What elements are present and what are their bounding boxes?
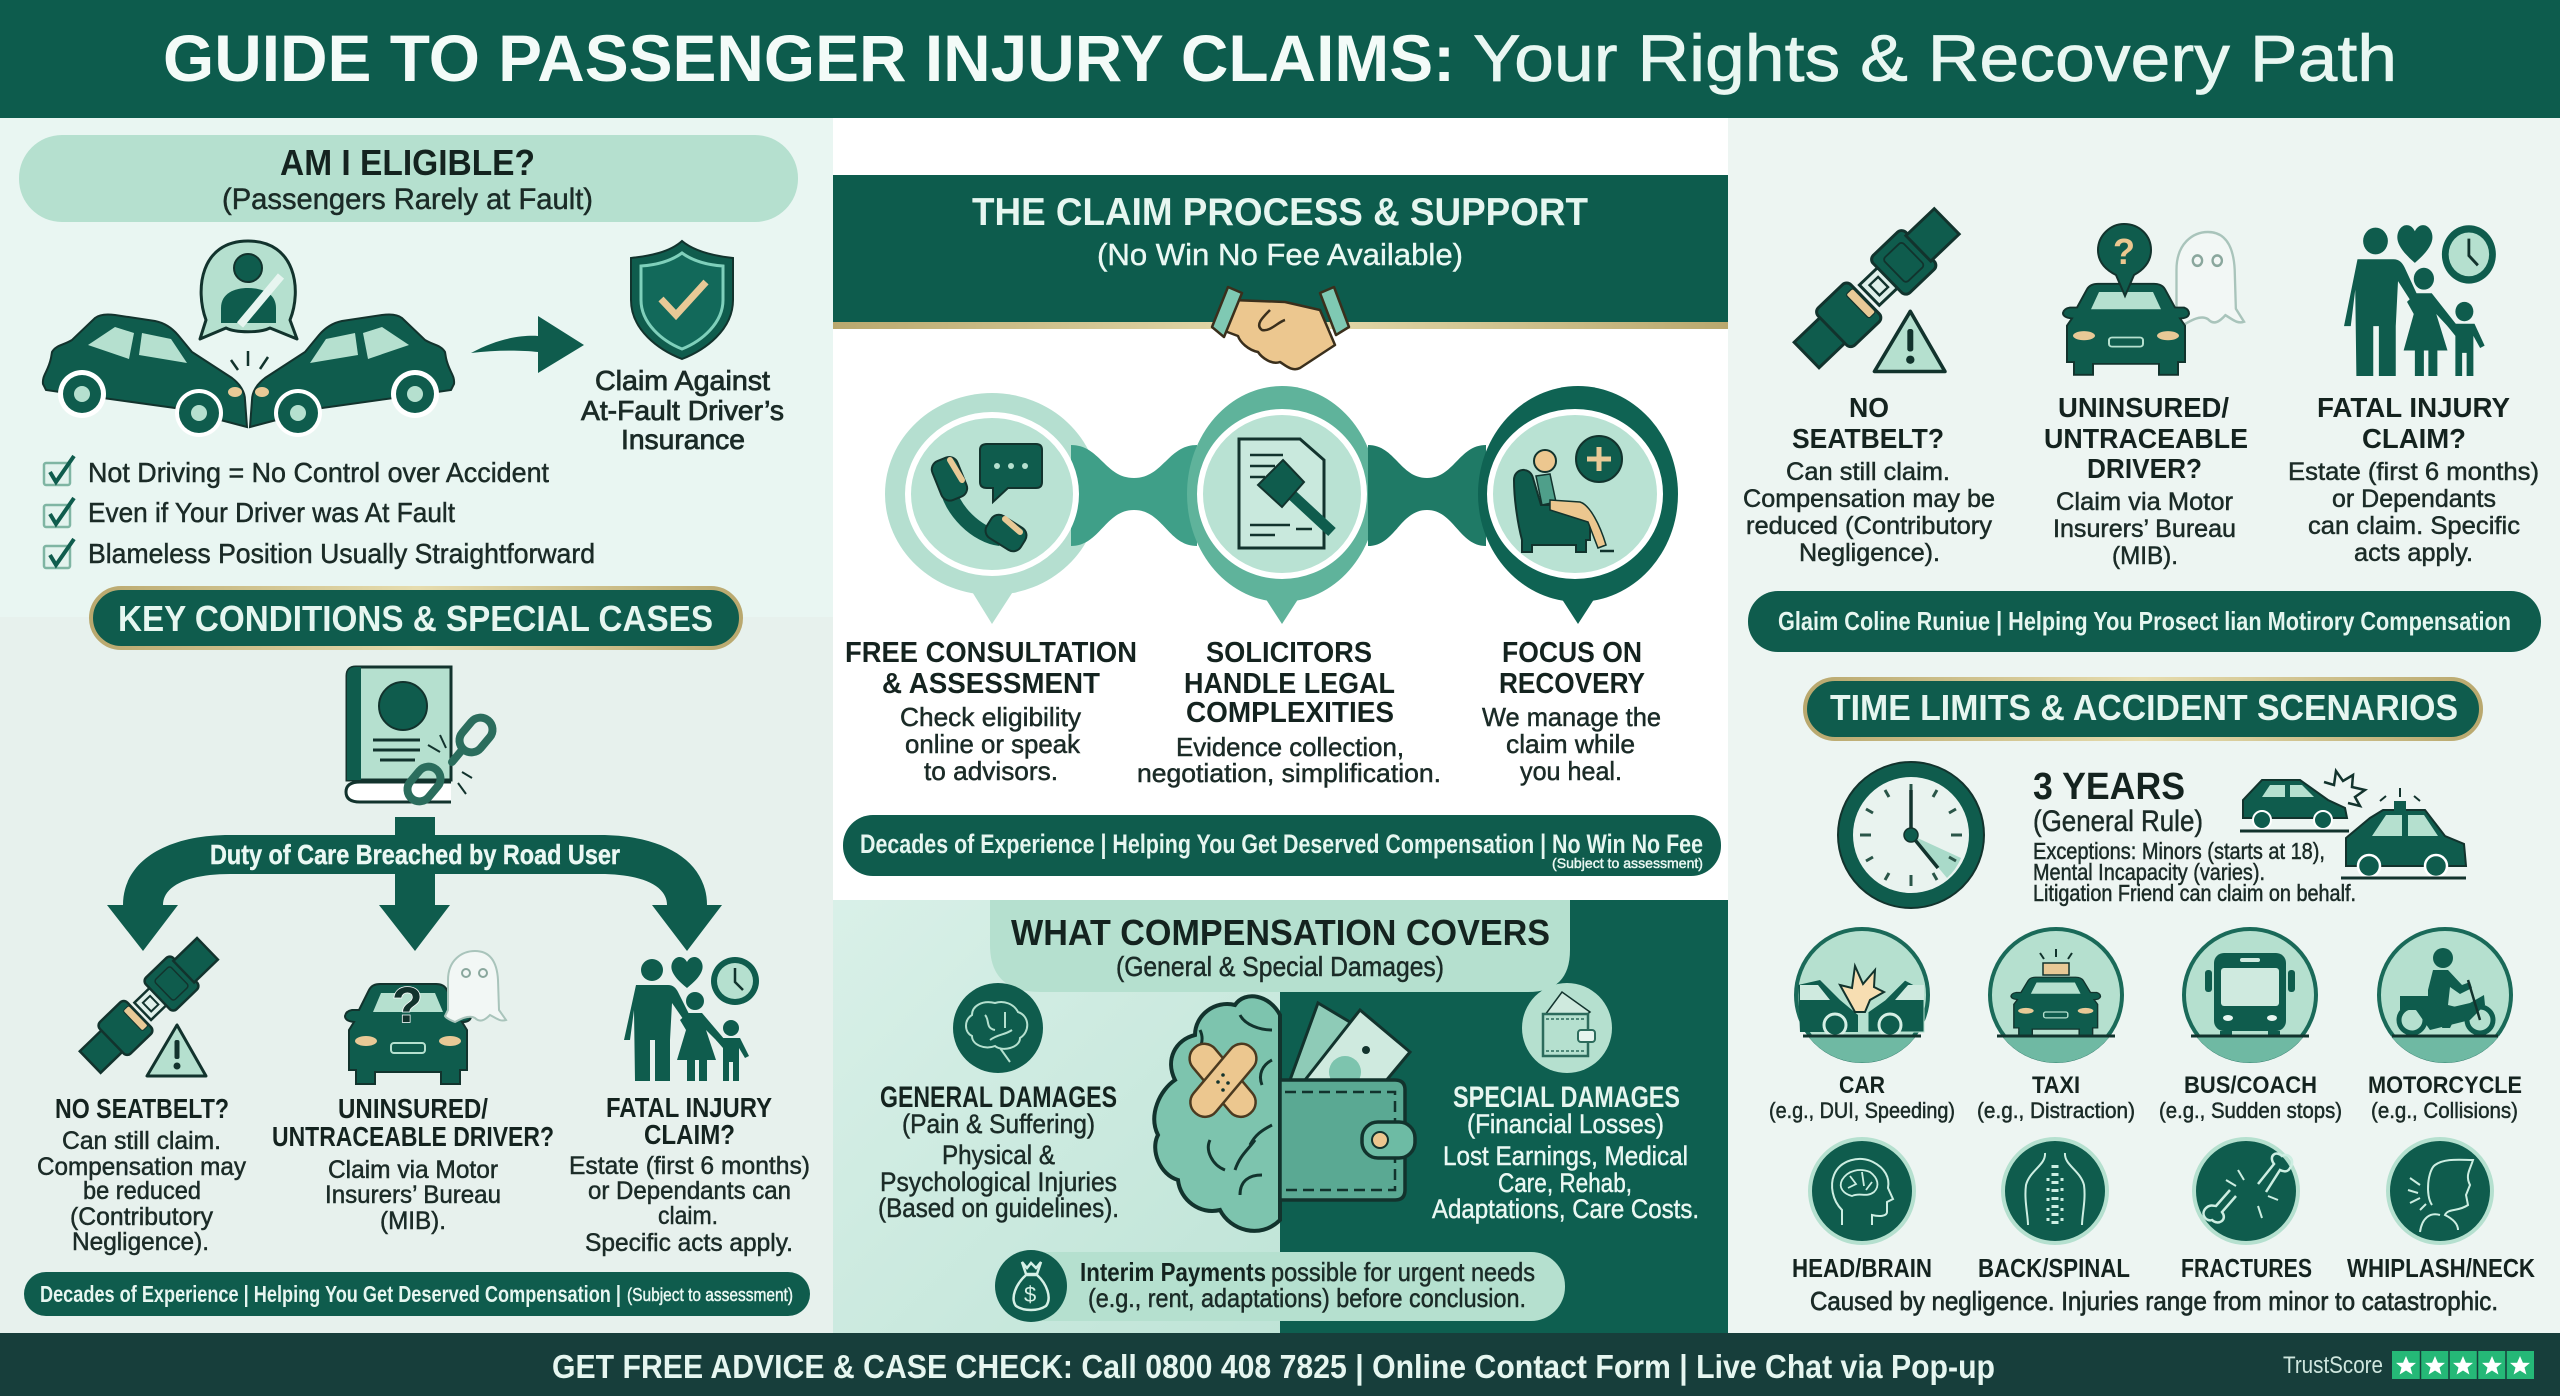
scenario: bus or coach: (e.g., Sudden stops)	[2159, 1098, 2342, 1123]
step 1 text	[845, 637, 1137, 786]
heading: time limits	[1805, 679, 2481, 739]
case: no seatbelt: (Contributory	[70, 1203, 213, 1231]
case: uninsured driver: UNTRACEABLE DRIVER?	[272, 1121, 554, 1152]
trust score rating	[2283, 1351, 2534, 1379]
injury: back and spine	[2003, 1139, 2107, 1243]
case: no seatbelt: be reduced	[83, 1177, 201, 1205]
icon: car collision	[2240, 771, 2466, 878]
case: no seatbelt: SEATBELT?	[1792, 423, 1944, 454]
flow: duty of care branching arrows	[107, 817, 722, 951]
text: claim against insurance: At-Fault Driver’s	[581, 395, 784, 426]
case: uninsured driver: (MIB).	[380, 1207, 446, 1235]
case: uninsured driver	[2044, 224, 2248, 570]
case: uninsured driver	[272, 951, 554, 1235]
case: no seatbelt: Compensation may	[37, 1153, 246, 1181]
footer call to action	[0, 1333, 2560, 1396]
step 2 text: Evidence collection,	[1176, 732, 1404, 762]
step 3 text: RECOVERY	[1499, 668, 1645, 700]
text: three year rule	[2033, 766, 2356, 906]
heading: compensation	[990, 900, 1570, 992]
text: injury labels: Caused by negligence. Injuries range from minor to catastrophic.	[1810, 1286, 2498, 1316]
callout: interim payments	[995, 1250, 1565, 1322]
flow: duty of care branching arrows: Duty of Care Breached by Road User	[210, 839, 620, 870]
panel: am I eligible	[19, 135, 798, 569]
case: uninsured driver: ?	[2113, 231, 2135, 272]
text: three year rule: Exceptions: Minors (starts at 18),	[2033, 838, 2325, 864]
heading: compensation: WHAT COMPENSATION COVERS	[1011, 912, 1550, 953]
case: no seatbelt: Compensation may be	[1743, 485, 1995, 513]
case: fatal injury: Estate (first 6 months)	[2288, 458, 2539, 486]
injury: whiplash and neck	[2388, 1139, 2492, 1243]
icon: wallet with banknotes	[1280, 1003, 1415, 1200]
case: fatal injury: claim.	[658, 1202, 718, 1230]
text: injury labels	[1792, 1253, 2535, 1316]
checklist: Not Driving = No Control over Accident	[88, 457, 549, 488]
banner: decades of experience: Decades of Experience | Helping You Get Deserved Compensation |	[40, 1281, 621, 1307]
step 1 text: online or speak	[905, 729, 1081, 759]
checklist	[44, 456, 595, 569]
text: three year rule: 3 YEARS	[2033, 766, 2185, 808]
case: uninsured driver: Insurers’ Bureau	[325, 1181, 501, 1209]
case: no seatbelt: Negligence).	[1799, 539, 1940, 567]
case: fatal injury: CLAIM?	[644, 1119, 735, 1150]
case: uninsured driver: Claim via Motor	[2056, 488, 2233, 516]
heading: compensation: (General & Special Damages)	[1116, 951, 1444, 982]
icon: small brain in circle	[953, 983, 1043, 1073]
scenario: taxi	[1977, 929, 2135, 1123]
scenario: car	[1769, 929, 1955, 1123]
step 3 icon: recovery armchair	[1478, 386, 1678, 624]
step 3 text: you heal.	[1520, 756, 1622, 786]
banner: decades of experience	[24, 1272, 810, 1316]
title banner: GUIDE TO PASSENGER INJURY CLAIMS:	[163, 21, 1455, 95]
step 1 text: & ASSESSMENT	[882, 668, 1100, 700]
panel: what compensation covers	[833, 900, 1728, 1334]
step 2 text	[1137, 637, 1441, 788]
heading: claim process: THE CLAIM PROCESS & SUPPORT	[972, 191, 1588, 234]
checklist: Blameless Position Usually Straightforward	[88, 538, 595, 569]
icon: law book with broken chain	[346, 667, 497, 806]
case: fatal injury: FATAL INJURY	[2317, 392, 2510, 423]
callout: interim payments: $	[1024, 1282, 1036, 1307]
text: three year rule: (General Rule)	[2033, 805, 2203, 838]
step 3 text: claim while	[1506, 729, 1635, 759]
scenario: motorcycle: MOTORCYCLE	[2368, 1072, 2522, 1099]
panel: key conditions and special cases	[24, 588, 810, 1316]
case: uninsured driver: UNINSURED/	[2058, 392, 2229, 423]
scenario: car: CAR	[1839, 1072, 1885, 1099]
trust score rating: TrustScore	[2283, 1352, 2383, 1379]
scenario: motorcycle	[2368, 929, 2522, 1123]
case: no seatbelt: NO	[1849, 392, 1889, 423]
callout: interim payments: Interim Payments	[1080, 1257, 1266, 1287]
step 2 text: SOLICITORS	[1206, 637, 1372, 669]
text: injury labels: WHIPLASH/NECK	[2347, 1253, 2535, 1283]
case: uninsured driver: DRIVER?	[2087, 453, 2202, 484]
case: no seatbelt	[1743, 203, 1995, 567]
callout: interim payments: possible for urgent needs	[1271, 1257, 1535, 1287]
heading: claim process: (No Win No Fee Available)	[1097, 237, 1463, 272]
case: uninsured driver: Insurers’ Bureau	[2053, 515, 2236, 543]
icon: brain with bandage	[1154, 996, 1280, 1231]
step 2 text: negotiation, simplification.	[1137, 758, 1441, 788]
icon: clock	[1838, 762, 1984, 908]
banner: compensation	[1748, 591, 2541, 652]
banner: decades of experience, no win no fee	[843, 815, 1721, 876]
text: general damages: (Based on guidelines).	[878, 1193, 1119, 1223]
step 3 text	[1482, 637, 1661, 786]
panel: right column special cases	[1743, 203, 2541, 652]
scenario: bus or coach	[2159, 929, 2342, 1123]
heading: time limits: TIME LIMITS & ACCIDENT SCENARIOS	[1830, 687, 2458, 728]
text: claim against insurance	[581, 365, 784, 455]
case: no seatbelt: Can still claim.	[62, 1127, 221, 1155]
text: injury labels: BACK/SPINAL	[1978, 1253, 2130, 1283]
heading: key conditions	[91, 588, 741, 648]
case: fatal injury: or Dependants can	[588, 1177, 791, 1205]
case: fatal injury: can claim. Specific	[2308, 512, 2520, 540]
text: injury labels: FRACTURES	[2181, 1253, 2312, 1283]
banner: decades of experience, no win no fee: (Subject to assessment)	[1552, 855, 1703, 871]
text: special damages: Care, Rehab,	[1498, 1168, 1632, 1198]
callout: interim payments: (e.g., rent, adaptations) before conclusion.	[1088, 1283, 1526, 1313]
heading: claim process	[833, 175, 1728, 329]
text: general damages: Physical &	[942, 1140, 1055, 1170]
step 1 icon: phone	[885, 393, 1197, 624]
case: uninsured driver: ?	[392, 977, 423, 1033]
heading: am I eligible	[19, 135, 798, 222]
heading: am I eligible: AM I ELIGIBLE?	[280, 142, 535, 183]
case: fatal injury	[2288, 225, 2539, 567]
step 2 text: COMPLEXITIES	[1186, 697, 1394, 729]
case: no seatbelt: Negligence).	[72, 1228, 209, 1256]
text: general damages: GENERAL DAMAGES	[880, 1081, 1117, 1114]
text: special damages: Lost Earnings, Medical	[1443, 1141, 1688, 1171]
panel: time limits and accident scenarios	[1769, 679, 2535, 1316]
case: no seatbelt: Can still claim.	[1786, 458, 1950, 486]
text: special damages: Adaptations, Care Costs.	[1432, 1194, 1699, 1224]
title banner	[0, 0, 2560, 118]
case: fatal injury: Specific acts apply.	[585, 1229, 793, 1257]
heading: am I eligible: (Passengers Rarely at Fault)	[222, 183, 593, 216]
banner: decades of experience: (Subject to assessment)	[627, 1285, 793, 1305]
case: uninsured driver: UNTRACEABLE	[2044, 423, 2248, 454]
text: three year rule: Mental Incapacity (varies).	[2033, 859, 2265, 885]
text: special damages	[1432, 1081, 1699, 1224]
text: general damages	[878, 1081, 1119, 1223]
icon: small wallet in circle	[1522, 983, 1612, 1073]
case: no seatbelt: reduced (Contributory	[1746, 512, 1992, 540]
step 3 text: FOCUS ON	[1502, 637, 1642, 669]
text: special damages: (Financial Losses)	[1467, 1109, 1664, 1139]
case: fatal injury: Estate (first 6 months)	[569, 1152, 810, 1180]
icon: shield with check	[631, 241, 733, 359]
case: uninsured driver: Claim via Motor	[328, 1156, 498, 1184]
step 1 text: FREE CONSULTATION	[845, 637, 1137, 669]
text: general damages: Psychological Injuries	[880, 1167, 1117, 1197]
title banner: Your Rights & Recovery Path	[1473, 21, 2397, 95]
scenario: car: (e.g., DUI, Speeding)	[1769, 1098, 1955, 1123]
heading: key conditions: KEY CONDITIONS & SPECIAL CASES	[118, 598, 713, 639]
arrow: to insurance claim	[471, 316, 584, 373]
injury: head and brain	[1810, 1139, 1914, 1243]
scenario: taxi: TAXI	[2032, 1072, 2080, 1099]
step 2 text: HANDLE LEGAL	[1184, 668, 1395, 700]
step 2 icon: document and gavel	[1187, 386, 1486, 624]
text: injury labels: HEAD/BRAIN	[1792, 1253, 1932, 1283]
checklist: Even if Your Driver was At Fault	[88, 497, 455, 528]
case: fatal injury: or Dependants	[2332, 485, 2496, 513]
footer call to action: GET FREE ADVICE & CASE CHECK: Call 0800 408 7825 | Online Contact Form | Live Chat via Pop-up	[552, 1348, 1995, 1385]
case: no seatbelt: NO SEATBELT?	[55, 1093, 229, 1124]
text: three year rule: Litigation Friend can claim on behalf.	[2033, 880, 2356, 906]
text: claim against insurance: Claim Against	[595, 365, 770, 396]
icon: crashed cars with belted passenger bubble	[43, 241, 454, 437]
text: claim against insurance: Insurance	[621, 424, 745, 455]
process chain	[885, 386, 1678, 624]
case: fatal injury	[569, 957, 810, 1257]
injury: fractures	[2194, 1139, 2298, 1243]
panel: claim process and support	[833, 175, 1728, 876]
text: general damages: (Pain & Suffering)	[902, 1109, 1095, 1139]
scenario: bus or coach: BUS/COACH	[2184, 1072, 2317, 1099]
case: fatal injury: acts apply.	[2354, 539, 2473, 567]
scenario: motorcycle: (e.g., Collisions)	[2371, 1098, 2518, 1123]
icon: handshake	[1212, 287, 1349, 369]
case: no seatbelt	[37, 933, 246, 1256]
step 3 text: We manage the	[1482, 702, 1661, 732]
banner: decades of experience, no win no fee: Decades of Experience | Helping You Get Deserved Compensation | No Win No Fee	[860, 829, 1703, 859]
case: uninsured driver: (MIB).	[2112, 542, 2178, 570]
case: fatal injury: FATAL INJURY	[606, 1092, 772, 1123]
step 1 text: to advisors.	[924, 756, 1058, 786]
scenario: taxi: (e.g., Distraction)	[1977, 1098, 2135, 1123]
case: fatal injury: CLAIM?	[2362, 423, 2466, 454]
case: uninsured driver: UNINSURED/	[338, 1093, 488, 1124]
step 1 text: Check eligibility	[900, 702, 1081, 732]
text: special damages: SPECIAL DAMAGES	[1453, 1081, 1680, 1114]
